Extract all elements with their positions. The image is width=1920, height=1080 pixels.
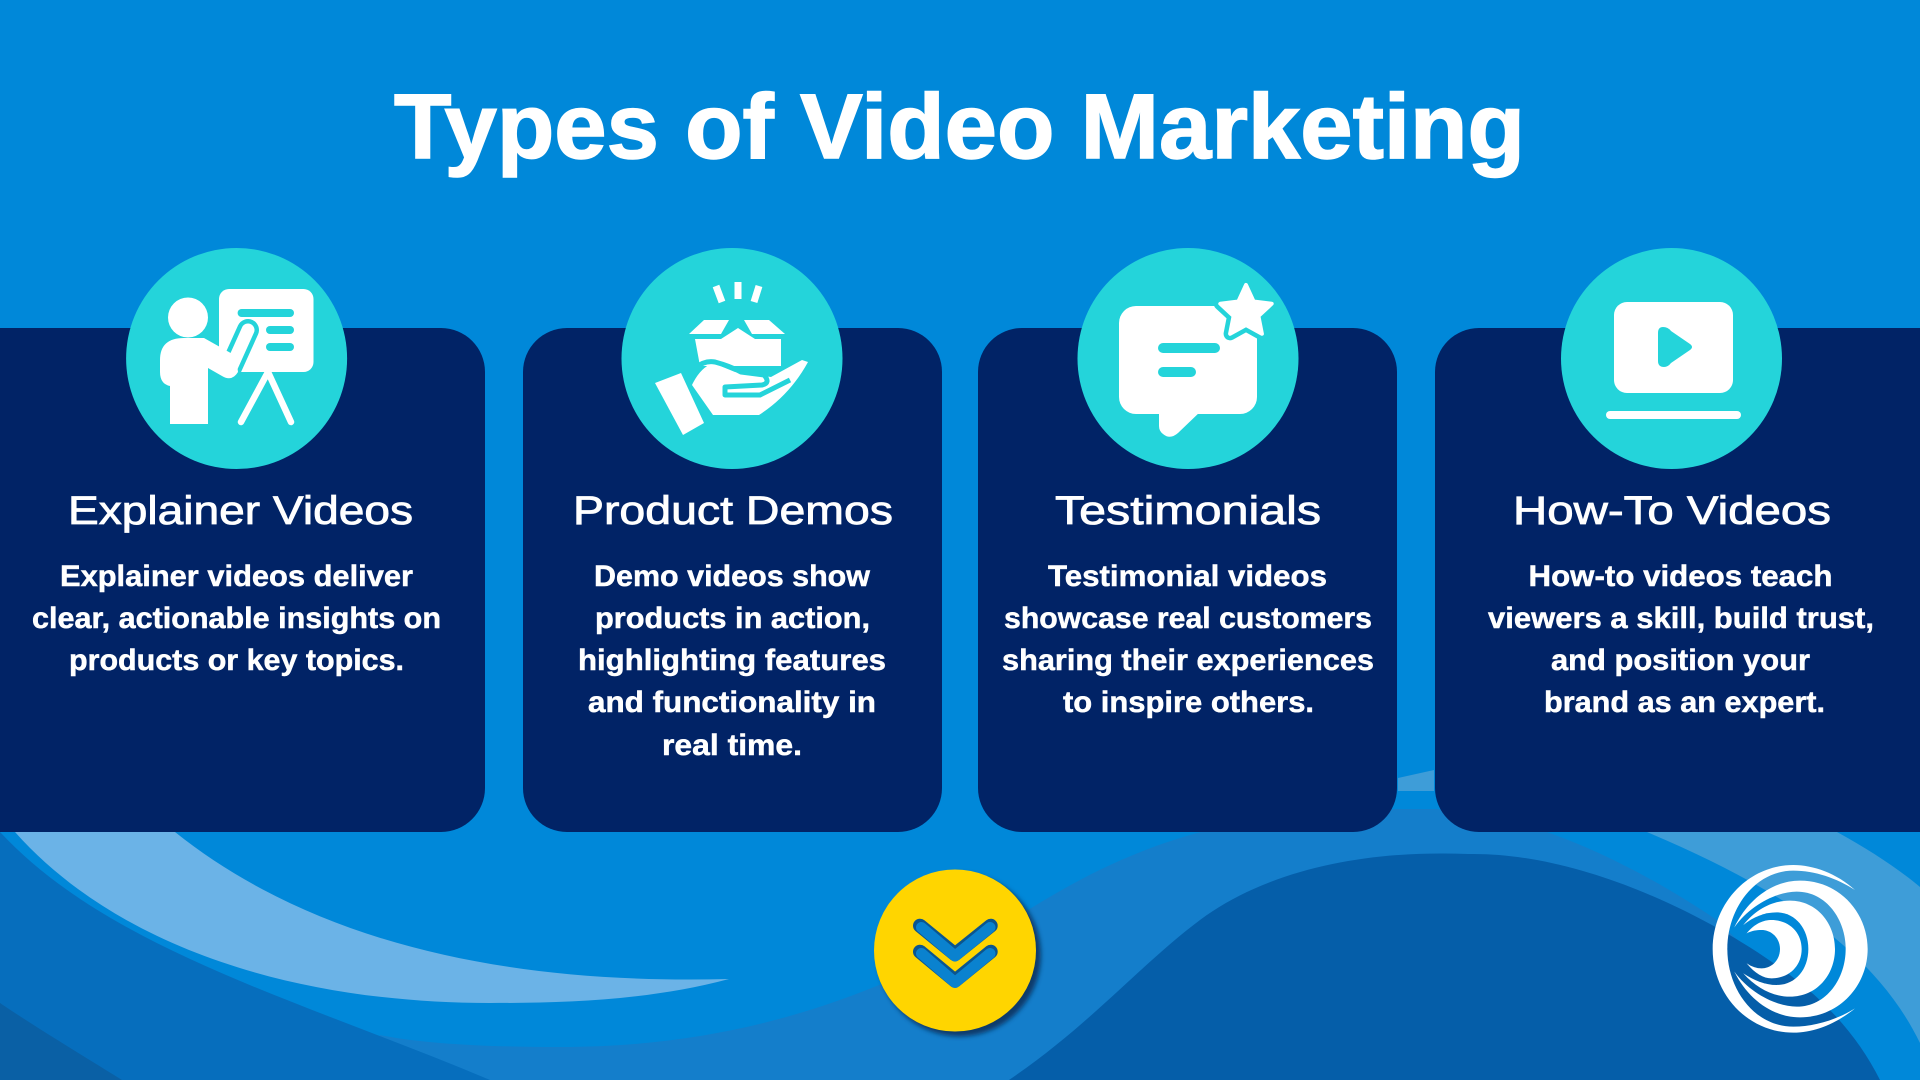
- body text: viewers a skill, build trust,: [1488, 602, 1874, 635]
- body text: [1002, 560, 1374, 719]
- body text: [578, 560, 886, 762]
- body text: brand as an expert.: [1544, 686, 1825, 719]
- heading: Product Demos: [573, 489, 893, 533]
- body text: showcase real customers: [1004, 602, 1372, 635]
- heading: Testimonials: [1055, 489, 1321, 533]
- heading: How-To Videos: [1513, 489, 1831, 533]
- body text: Testimonial videos: [1048, 560, 1327, 593]
- icon: yellow scroll-down button: [874, 870, 1041, 1036]
- body text: products in action,: [595, 602, 870, 635]
- title: Types of Video Marketing: [394, 76, 1525, 178]
- panel: product demos: [523, 248, 942, 832]
- icon: hand with box: [622, 248, 842, 469]
- body text: sharing their experiences: [1002, 644, 1374, 677]
- body text: [32, 560, 441, 677]
- body text: products or key topics.: [69, 644, 404, 677]
- icon: chat bubble with star: [1078, 248, 1298, 469]
- body text: How-to videos teach: [1528, 560, 1832, 593]
- body text: real time.: [662, 729, 802, 762]
- body text: highlighting features: [578, 644, 886, 677]
- icon: video player: [1561, 248, 1782, 469]
- body text: to inspire others.: [1063, 686, 1314, 719]
- panel: how-to videos: [1435, 248, 1920, 832]
- panel: explainer videos: [0, 248, 485, 832]
- body text: Explainer videos deliver: [60, 560, 413, 593]
- body text: Demo videos show: [594, 560, 871, 593]
- body text: and functionality in: [588, 686, 876, 719]
- icon: white spiral logo: [1712, 865, 1868, 1033]
- body text: clear, actionable insights on: [32, 602, 441, 635]
- panel: testimonials: [978, 248, 1397, 832]
- heading: Explainer Videos: [68, 489, 413, 533]
- body text: and position your: [1551, 644, 1810, 677]
- body text: [1488, 560, 1874, 719]
- icon: presenter at board: [126, 248, 347, 469]
